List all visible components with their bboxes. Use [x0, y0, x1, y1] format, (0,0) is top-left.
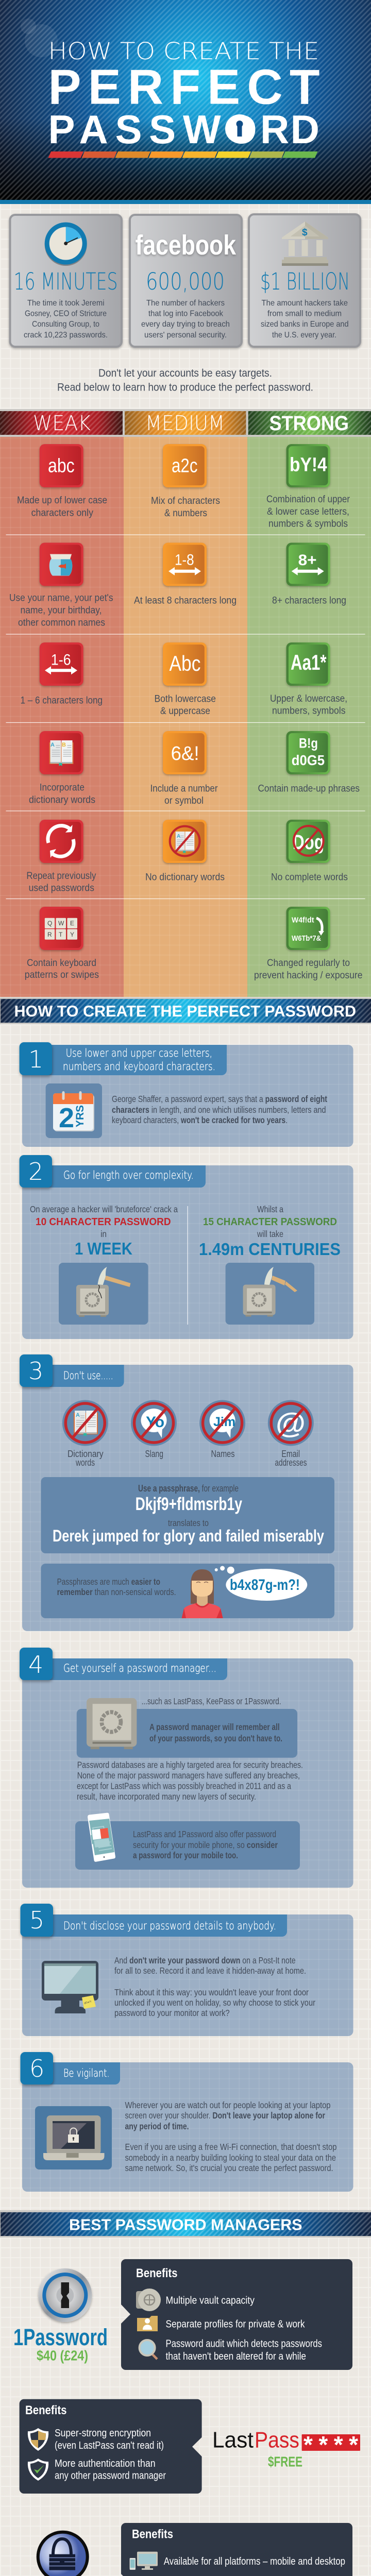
description	[24, 299, 108, 340]
step 2 number	[20, 1155, 52, 1188]
row 5 weak text: used passwords	[29, 883, 94, 893]
icon: laptop with padlock	[35, 2106, 112, 2170]
don't use: email addresses: @	[276, 1406, 306, 1439]
section banner: best password managers: BEST PASSWORD MANAGERS	[69, 2215, 302, 2233]
description: crack 10,223 passwords.	[24, 331, 108, 340]
don't use: slang: Yo	[146, 1414, 164, 1431]
row 2 weak text: Use your name, your pet's	[9, 592, 113, 603]
manager: 1Password: 1Password	[13, 2324, 108, 2350]
row 4 weak text: dictionary words	[29, 794, 95, 805]
15 character comparison: Whilst a	[257, 1204, 283, 1214]
manager: LastPass	[20, 2399, 360, 2494]
title line 1: HOW TO CREATE THE	[48, 38, 319, 65]
step 4 number	[20, 1648, 53, 1680]
row 1 strong text	[266, 494, 350, 530]
intro text: Read below to learn how to produce the perfect password.	[57, 381, 313, 393]
description: every day trying to breach	[141, 320, 230, 329]
step 6 number: 6	[29, 2055, 44, 2082]
security paragraph: None of the major password managers have suffered any breaches,	[77, 1770, 300, 1781]
weak tile: keyboard keys: E	[70, 920, 74, 927]
icon: devices	[130, 2552, 158, 2570]
manager: KeePass	[25, 2523, 352, 2576]
manager examples: ...such as LastPass, KeePass or 1Password.	[142, 1696, 281, 1706]
strong tile: changed passwords: W4f!dt	[292, 916, 314, 924]
weak tile: keyboard keys	[40, 907, 83, 950]
row 4 medium text	[150, 784, 218, 806]
icon: phone	[88, 1813, 115, 1862]
15 character comparison: 1.49m CENTURIES	[199, 1240, 341, 1259]
weak tile: dictionary book	[40, 731, 83, 774]
row 1 strong text: & lower case letters,	[267, 506, 349, 517]
step 6 text	[125, 2100, 337, 2173]
step 5 text	[114, 1955, 315, 2018]
benefits panel: More authentication than	[55, 2458, 156, 2469]
benefits panel: Multiple vault capacity	[166, 2295, 255, 2307]
strong tile: B!g d0G5: B!g	[299, 736, 318, 751]
step 1 text: characters in length, and one which utilises numbers, letters and	[112, 1105, 326, 1115]
row 6 strong text: prevent hacking / exposure	[254, 970, 363, 981]
security paragraph: result, have incorporated many new layers of security.	[77, 1791, 256, 1802]
step 1 text: keyboard characters, won't be cracked for two years.	[112, 1115, 288, 1125]
strong tile: 8+: 8+	[298, 552, 317, 569]
row 5 medium text: No dictionary words	[145, 872, 225, 883]
password manager callout	[77, 1698, 297, 1758]
row 4 weak text	[29, 783, 95, 805]
10 character comparison: in	[100, 1229, 107, 1239]
mobile callout: security for your mobile phone, so consider	[133, 1840, 278, 1850]
benefits panel: Benefits	[25, 2403, 67, 2417]
description: users' personal security.	[144, 331, 227, 340]
medium tile: 1-8	[163, 543, 207, 586]
row 4 weak text: Incorporate	[40, 783, 85, 793]
step 5 text: Think about it this way: you wouldn't leave your front door	[114, 1987, 309, 1997]
title line 3	[48, 107, 319, 152]
10 character comparison: On average a hacker will 'bruteforce' crack a	[30, 1204, 178, 1214]
don't use: dictionary words	[62, 1400, 108, 1468]
row 1 strong text: numbers & symbols	[268, 518, 348, 530]
benefits panel	[121, 2523, 352, 2576]
weak tile: abc	[40, 444, 83, 487]
step 5 heading bar: Don't disclose your password details to anybody.	[63, 1920, 276, 1932]
row 1 medium text	[151, 496, 220, 519]
strength comparison table	[0, 409, 371, 997]
icon: calendar 2 years: YRS	[74, 1105, 86, 1127]
15 character comparison	[199, 1204, 341, 1325]
step 5 text: And don't write your password down on a Post-It note	[114, 1955, 296, 1965]
step 4 heading bar	[31, 1658, 227, 1680]
step 1 panel	[20, 1042, 353, 1147]
row 2 weak text	[9, 592, 113, 629]
strong tile: no complete words	[286, 820, 330, 863]
don't use: email addresses: Email	[281, 1449, 300, 1459]
logo: facebook: facebook	[135, 230, 237, 261]
passphrase memory box: Passphrases are much easier to	[57, 1577, 160, 1587]
strong tile: bY!4: bY!4	[290, 454, 327, 476]
section banner: best password managers	[0, 2210, 371, 2238]
passphrase memory box: remember than non-sensical words.	[57, 1587, 176, 1597]
step 5 number: 5	[29, 1906, 44, 1934]
benefits panel: Super-strong encryption	[55, 2428, 151, 2439]
title line 3: O	[226, 107, 257, 152]
benefits panel: (even LastPass can't read it)	[55, 2440, 164, 2451]
weak tile: keyboard keys: R	[47, 931, 52, 938]
stat card: 16 minutes	[10, 215, 122, 347]
thought bubble: b4x87g-m?!	[230, 1577, 300, 1594]
medium tile: a2c: a2c	[172, 455, 198, 477]
icon: folder profile	[137, 2316, 158, 2331]
row 4 medium text: or symbol	[164, 795, 204, 806]
step 2 panel	[20, 1155, 353, 1339]
row 2 weak text: other common names	[18, 618, 105, 629]
step 3 number: 3	[28, 1357, 43, 1385]
step 6 number	[21, 2052, 53, 2084]
description: The number of hackers	[146, 299, 225, 308]
row 5 weak text	[26, 871, 96, 893]
column header: strong: STRONG	[269, 412, 349, 435]
step 4 panel	[20, 1648, 353, 1888]
row 2 weak text: name, your birthday,	[21, 605, 102, 616]
row 3 medium text: & uppercase	[160, 706, 210, 717]
step 6 text: somebody in a nearby building looking to steal your data on the	[125, 2153, 336, 2163]
strong tile: changed passwords: W6Tb*7&	[292, 934, 321, 943]
weak tile: keyboard keys: Q	[47, 920, 52, 927]
step 3 heading bar: Don't use.....	[63, 1369, 113, 1382]
thought bubble	[215, 1566, 307, 1601]
column header: weak: WEAK	[33, 412, 91, 435]
password manager callout: A password manager will remember all	[149, 1722, 280, 1732]
weak tile: fish bowl	[40, 543, 83, 586]
row 2 strong text: 8+ characters long	[272, 596, 346, 606]
column header: weak	[0, 411, 123, 435]
description: the U.S. every year.	[272, 331, 336, 340]
passphrase example box: Use a passphrase, for example	[138, 1483, 239, 1494]
benefits panel: any other password manager	[55, 2470, 166, 2482]
benefits panel: that haven't been altered for a while	[166, 2351, 306, 2362]
icon: shield with tick	[28, 2459, 48, 2481]
step 5 text: for all to see. Record it and leave it hidden-away at home.	[114, 1965, 306, 1976]
row 1 medium text: & numbers	[164, 508, 207, 519]
10 character comparison: 1 WEEK	[75, 1239, 132, 1258]
medium tile: 1-8: 1-8	[175, 551, 194, 569]
header: title banner	[0, 0, 371, 204]
section banner: how to create	[0, 997, 371, 1024]
icon: bank: $	[302, 227, 308, 238]
strong tile: Aa1*: Aa1*	[291, 650, 327, 674]
step 1 heading bar: Use lower and upper case letters,	[66, 1047, 212, 1059]
section banner: how to create: HOW TO CREATE THE PERFECT PASSWORD	[14, 1002, 356, 1020]
row 6 weak text: Contain keyboard	[27, 958, 96, 969]
row 6 strong text	[254, 958, 363, 981]
step 6 text: Even if you are using a free Wi-Fi connection, that doesn't stop	[125, 2142, 337, 2152]
row 5 weak text: Repeat previously	[26, 871, 96, 882]
don't use: names: Names	[211, 1449, 235, 1459]
don't use: dictionary words: words	[75, 1458, 95, 1468]
row 3 medium text	[155, 694, 216, 717]
step 6 heading bar	[31, 2062, 120, 2084]
step 5 panel	[21, 1904, 353, 2036]
description: from small to medium	[267, 310, 342, 318]
icon: shield	[28, 2428, 48, 2451]
title line 3: PASSW	[48, 107, 221, 152]
icon: clock	[45, 223, 87, 266]
icon: safe	[87, 1698, 137, 1749]
row 1 weak text: Made up of lower case	[17, 495, 107, 506]
row 3 medium text: Both lowercase	[155, 694, 216, 705]
step 5 text: password to your monitor at work?	[114, 2008, 230, 2018]
passphrase memory box	[41, 1564, 334, 1618]
logo: LastPass: Last	[212, 2428, 254, 2453]
column header: medium	[125, 411, 246, 435]
title line 2: PERFECT	[48, 60, 319, 114]
icon: calendar 2 years	[46, 1083, 102, 1138]
step 1 text: George Shaffer, a password expert, says that a password of eight	[112, 1094, 327, 1104]
description: Gosney, CEO of Stricture	[25, 310, 107, 318]
mobile callout: a password for your mobile too.	[133, 1850, 238, 1860]
row 3 strong text: numbers, symbols	[272, 706, 345, 716]
weak tile: 1-6: 1-6	[51, 652, 71, 669]
row 6 strong text: Changed regularly to	[267, 958, 350, 969]
row 3 strong text: Upper & lowercase,	[270, 693, 347, 704]
medium tile: 6&!: 6&!	[171, 743, 199, 765]
medium tile: a2c	[163, 444, 207, 487]
step 2 heading bar	[31, 1165, 206, 1188]
step 4 number: 4	[28, 1651, 43, 1679]
row 1 medium text: Mix of characters	[151, 496, 220, 506]
weak tile: dictionary book: A	[50, 742, 55, 748]
step 1 heading bar: numbers and keyboard characters.	[63, 1060, 215, 1073]
step 1 text	[112, 1094, 327, 1125]
strong tile: B!g d0G5: d0G5	[292, 752, 325, 768]
benefits panel: Password audit which detects passwords	[166, 2338, 322, 2350]
column header: medium: MEDIUM	[145, 412, 225, 435]
step 6 text: any period of time.	[125, 2121, 189, 2131]
weak tile: repeat arrows	[40, 820, 83, 863]
logo: KeePass	[37, 2531, 89, 2576]
row 1 strong text: Combination of upper	[266, 494, 350, 505]
description: that log into Facebook	[148, 310, 224, 318]
icon: hammer cracking safe	[59, 1263, 148, 1325]
step 5 number	[21, 1904, 53, 1937]
step 3 number	[20, 1354, 53, 1387]
weak tile: keyboard keys: T	[59, 931, 63, 938]
don't use: dictionary words: Dictionary	[68, 1449, 104, 1459]
strong tile: no complete words: Dog	[293, 831, 324, 854]
step 5 text: unlocked if you went on holiday, so why choose to stick your	[114, 1997, 315, 2008]
passphrase example box: translates to	[168, 1518, 209, 1528]
step 6 heading bar: Be vigilant.	[63, 2067, 110, 2079]
medium tile: Abc: Abc	[169, 651, 200, 675]
title line 3: RD	[260, 107, 319, 152]
security paragraph: Password databases are a highly targeted area for security breaches.	[77, 1760, 303, 1770]
column header: strong	[248, 411, 371, 435]
icon: bank	[282, 222, 328, 266]
row 6 weak text: patterns or swipes	[25, 970, 99, 980]
intro text	[57, 367, 313, 393]
benefits panel: Benefits	[132, 2528, 173, 2541]
step 5 heading bar	[31, 1914, 287, 1937]
passphrase example box: Dkjf9+fldmsrb1y	[136, 1494, 242, 1514]
medium tile: no dictionary: A	[177, 834, 180, 839]
step 2 heading bar: Go for length over complexity.	[63, 1169, 194, 1181]
figure: 600,000	[146, 268, 225, 295]
strong tile: 8+	[286, 543, 330, 586]
icon: magnifier	[140, 2340, 157, 2359]
weak tile: 1-6	[40, 642, 83, 686]
icon: woman thinking	[182, 1569, 223, 1618]
step 6 text: Wherever you are watch out for people looking at your laptop	[125, 2100, 331, 2110]
weak tile: abc: abc	[48, 455, 75, 477]
intro text: Don't let your accounts be easy targets.	[98, 367, 272, 379]
step 4 heading bar: Get yourself a password manager...	[63, 1662, 216, 1674]
row 1 weak text: characters only	[31, 508, 93, 519]
step 1 number	[20, 1042, 52, 1075]
don't use: names	[199, 1400, 245, 1459]
step 3 heading bar	[31, 1365, 124, 1387]
icon: calendar 2 years: 2	[59, 1103, 74, 1133]
step 1 number: 1	[28, 1045, 43, 1073]
mobile callout: LastPass and 1Password also offer password	[133, 1829, 276, 1839]
logo: 1Password	[38, 2268, 92, 2322]
step 3 panel	[20, 1354, 353, 1631]
strong tile: bY!4	[286, 444, 330, 487]
description	[261, 299, 348, 340]
icon: hammer breaking on safe	[226, 1263, 314, 1325]
benefits panel	[20, 2399, 202, 2494]
row 3 strong text	[270, 693, 347, 716]
figure: 16 MINUTES	[13, 268, 117, 295]
price: $40 (£24)	[37, 2348, 88, 2364]
row 3 weak text: 1 – 6 characters long	[21, 696, 103, 706]
15 character comparison: 15 CHARACTER PASSWORD	[203, 1216, 337, 1228]
strong tile: B!g d0G5	[286, 731, 330, 774]
row 1 weak text	[17, 495, 107, 519]
security paragraph	[77, 1760, 303, 1802]
description: The time it took Jeremi	[27, 299, 104, 308]
don't use: names: Jim	[213, 1415, 235, 1429]
step 6 text: same network. So, it's crucial you create the perfect password.	[125, 2163, 333, 2173]
weak tile: dictionary book: B	[62, 742, 66, 748]
mobile callout	[75, 1813, 300, 1870]
don't use: slang: Slang	[145, 1449, 163, 1459]
description: The amount hackers take	[262, 299, 348, 308]
10 character comparison: 10 CHARACTER PASSWORD	[36, 1216, 171, 1228]
10 character comparison	[30, 1204, 178, 1325]
benefits panel: Benefits	[136, 2266, 177, 2280]
step 2 number: 2	[28, 1158, 43, 1185]
step 1 heading bar	[31, 1045, 227, 1075]
step 6 text: screen over your shoulder. Don't leave your laptop alone for	[125, 2110, 325, 2121]
medium tile: Abc	[163, 642, 207, 686]
step 6 panel	[21, 2052, 353, 2192]
don't use: dictionary words: A	[76, 1412, 80, 1418]
password manager callout: of your passwords, so you don't have to.	[149, 1733, 282, 1743]
row 4 strong text: Contain made-up phrases	[258, 784, 360, 794]
icon: vault	[136, 2289, 161, 2311]
icon: monitor with post-it	[42, 1961, 98, 2013]
logo: LastPass: ****	[303, 2431, 358, 2458]
row 2 medium text: At least 8 characters long	[134, 596, 237, 606]
strength colour bar	[48, 151, 317, 158]
don't use: slang	[131, 1400, 177, 1459]
security paragraph: except for LastPass which was possibly breached in 2011 and as a	[77, 1781, 291, 1791]
manager: 1Password	[13, 2259, 352, 2370]
description	[141, 299, 230, 340]
benefits panel	[121, 2259, 352, 2370]
don't use: email addresses: addresses	[275, 1458, 307, 1468]
price: $FREE	[268, 2454, 302, 2470]
strong tile: changed passwords	[286, 907, 330, 950]
medium tile: no dictionary	[163, 820, 207, 863]
logo: LastPass	[212, 2428, 360, 2458]
description: sized banks in Europe and	[261, 320, 348, 329]
15 character comparison: will take	[257, 1229, 283, 1239]
stat card: facebook	[130, 215, 242, 347]
passphrase example box	[41, 1477, 334, 1553]
stat card: 1 billion	[249, 214, 360, 347]
row 5 strong text: No complete words	[271, 872, 348, 883]
icon: monitor with post-it: gGw?!	[84, 2000, 92, 2005]
weak tile: keyboard keys: Y	[70, 931, 74, 938]
benefits panel: Separate profiles for private & work	[166, 2319, 305, 2330]
don't use: email addresses	[268, 1400, 314, 1468]
row 4 medium text: Include a number	[150, 784, 218, 794]
row 6 weak text	[25, 958, 99, 980]
medium tile: 6&!	[163, 731, 207, 774]
description: Consulting Group, to	[32, 320, 99, 329]
logo: LastPass: Pass	[255, 2428, 299, 2453]
strong tile: Aa1*	[286, 642, 330, 686]
weak tile: keyboard keys: W	[58, 920, 64, 927]
